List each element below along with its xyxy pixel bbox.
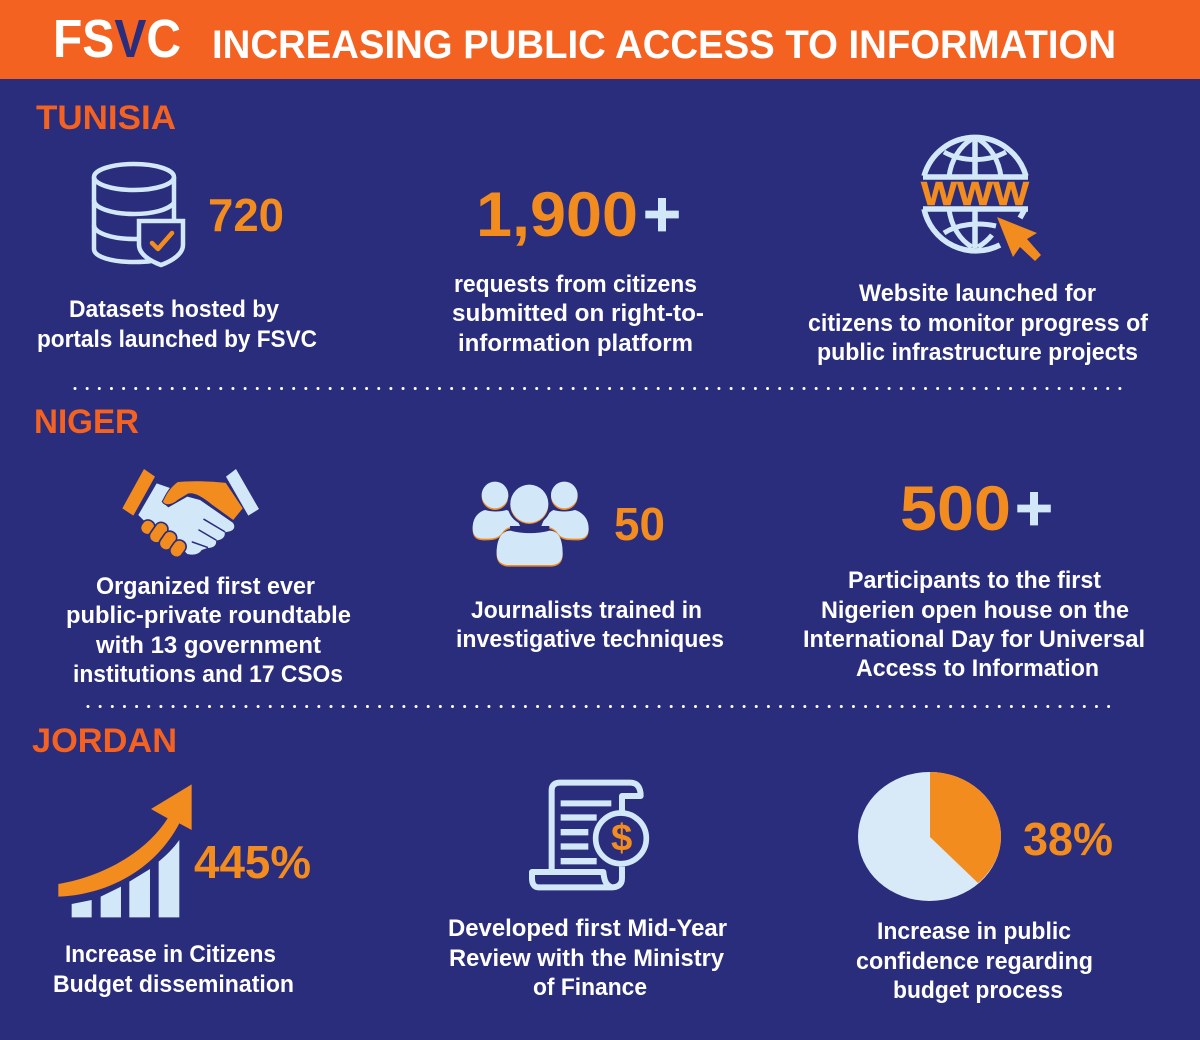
text: public confidence: confidence regarding <box>856 948 1093 975</box>
title: INCREASING PUBLIC ACCESS TO INFORMATION <box>212 23 1116 67</box>
text: participants: Participants to the first <box>848 567 1101 594</box>
text: roundtable <box>66 573 351 688</box>
icon: handshake <box>122 469 259 560</box>
text: datasets <box>37 296 317 353</box>
text: website: citizens to monitor progress of <box>808 310 1149 337</box>
stat: 500+: + <box>1015 472 1053 544</box>
text: public confidence <box>856 918 1093 1004</box>
text: roundtable: Organized first ever <box>96 573 315 600</box>
text: website: public infrastructure projects <box>817 339 1138 366</box>
text: citizens budget <box>53 941 294 998</box>
icon: budget document with dollar <box>532 783 646 887</box>
text: public confidence: Increase in public <box>877 918 1071 945</box>
stat: 445%: 445% <box>194 836 311 888</box>
text: mid-year review <box>448 915 727 1001</box>
text: requests <box>452 271 704 357</box>
text: journalists <box>456 597 724 653</box>
text: website: Website launched for <box>859 280 1096 307</box>
icon: group of people <box>473 482 589 567</box>
text: journalists: Journalists trained in <box>471 597 702 624</box>
text: participants: Nigerien open house on the <box>821 597 1129 624</box>
text: roundtable: institutions and 17 CSOs <box>73 661 343 688</box>
text: participants: Access to Information <box>856 655 1099 682</box>
text: participants: International Day for Universal <box>803 626 1145 653</box>
text: mid-year review: Review with the Ministry <box>449 945 725 972</box>
pie chart: 38% <box>858 772 1001 901</box>
icon: database with shield <box>94 164 183 265</box>
icon: www globe with cursor <box>921 137 1041 261</box>
text: mid-year review: of Finance <box>533 974 647 1001</box>
text: journalists: investigative techniques <box>456 626 724 653</box>
section heading: Jordan: JORDAN <box>32 722 177 760</box>
text: datasets: portals launched by FSVC <box>37 326 317 353</box>
stat: 720: 720 <box>208 189 284 241</box>
text: citizens budget: Budget dissemination <box>53 971 294 998</box>
stat: 50: 50 <box>614 498 665 550</box>
icon: growth chart with arrow <box>58 784 192 917</box>
text: public confidence: budget process <box>893 977 1063 1004</box>
stat: 500+: 500 <box>900 474 1011 544</box>
text: mid-year review: Developed first Mid-Year <box>448 915 727 942</box>
stat: 38%: 38% <box>1023 813 1113 865</box>
text: participants <box>803 567 1145 682</box>
text: requests: submitted on right-to- <box>452 300 704 327</box>
section heading: Niger: NIGER <box>34 403 139 441</box>
text: roundtable: with 13 government <box>95 632 321 659</box>
text: roundtable: public-private roundtable <box>66 602 351 629</box>
text: requests: requests from citizens <box>454 271 697 298</box>
text: datasets: Datasets hosted by <box>69 296 280 323</box>
stat: 1,900+: 1,900 <box>476 180 638 250</box>
text: requests: information platform <box>458 330 693 357</box>
stat: 500+ <box>900 472 1053 544</box>
header banner <box>0 0 1200 79</box>
stat: 1,900+: + <box>643 178 681 250</box>
section heading: Tunisia: TUNISIA <box>36 99 176 137</box>
text: website <box>808 280 1149 366</box>
icon: www globe with cursor: WWW <box>921 175 1030 212</box>
logo: FSVC: FSVC <box>53 9 181 69</box>
text: citizens budget: Increase in Citizens <box>65 941 276 968</box>
icon: budget document with dollar: $ <box>611 817 632 860</box>
